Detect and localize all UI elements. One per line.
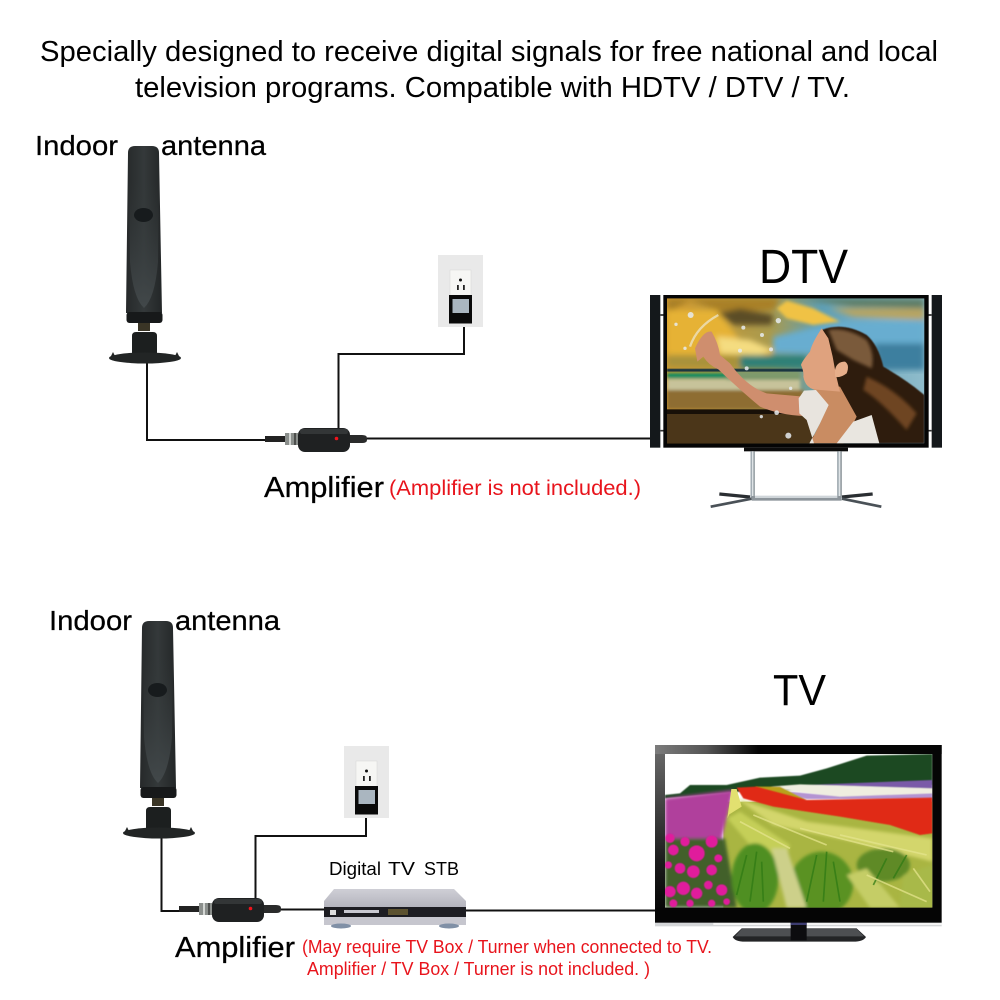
note: TV box requirement: Amplifier / TV Box / Turner is not included. ) (307, 959, 650, 979)
label: DTV: DTV (759, 241, 848, 294)
woman: arm and hand (695, 332, 803, 416)
label: Digital TV STB: Digital (329, 858, 381, 879)
label: indoor antenna (49, 605, 281, 636)
icon: amplifier (179, 898, 281, 922)
icon: antenna (123, 621, 195, 838)
bezel (663, 295, 929, 448)
panel: TV setup (49, 605, 942, 979)
icon: amplifier (265, 428, 367, 452)
speakers (650, 295, 942, 448)
panel: DTV setup (35, 130, 942, 507)
label: indoor antenna: Indoor (35, 130, 118, 161)
grass streaks (737, 815, 930, 902)
woman: blouse (799, 390, 829, 443)
icon: LCD television (655, 745, 942, 942)
trees (665, 754, 932, 798)
cables (162, 808, 656, 911)
note: amplifier not included: (Amplifier is not included.) (389, 477, 641, 500)
label: indoor antenna: Indoor (49, 605, 132, 636)
pale path (727, 789, 742, 818)
label: Digital TV STB: STB (424, 858, 459, 879)
icon: DTV flat screen (650, 295, 942, 507)
label: Digital TV STB: TV (388, 858, 416, 879)
magenta flowers (664, 834, 730, 907)
note: TV box requirement: (May require TV Box / Turner when connected to TV. (302, 937, 712, 957)
screen picture (667, 298, 924, 444)
title: television programs. Compatible with HDTV / DTV / TV. (135, 72, 850, 104)
title (40, 36, 938, 104)
label: amplifier: Amplifier (264, 472, 384, 504)
label: amplifier: Amplifier (175, 932, 295, 964)
label: indoor antenna (35, 130, 267, 161)
icon: antenna (109, 146, 181, 364)
title: Specially designed to receive digital signals for free national and local (40, 36, 938, 68)
icon: wall outlet with adapter (438, 255, 483, 327)
icon: set-top box (324, 889, 466, 928)
woman: hair (822, 327, 924, 443)
icon: wall outlet with adapter (344, 746, 389, 818)
base strip and stand (655, 922, 942, 942)
water drops (674, 312, 792, 439)
red flower band (737, 787, 932, 835)
fields (723, 802, 932, 908)
label: TV: TV (773, 666, 827, 715)
label: Digital TV STB (329, 858, 459, 879)
label: indoor antenna: antenna (161, 130, 267, 161)
screen picture (664, 754, 932, 915)
bezel (655, 745, 942, 923)
cables (147, 323, 650, 440)
label: indoor antenna: antenna (175, 605, 281, 636)
note: TV box requirement (302, 937, 712, 979)
woman: chest and neck (810, 387, 857, 443)
woman: face (801, 328, 840, 392)
stand (711, 448, 881, 507)
